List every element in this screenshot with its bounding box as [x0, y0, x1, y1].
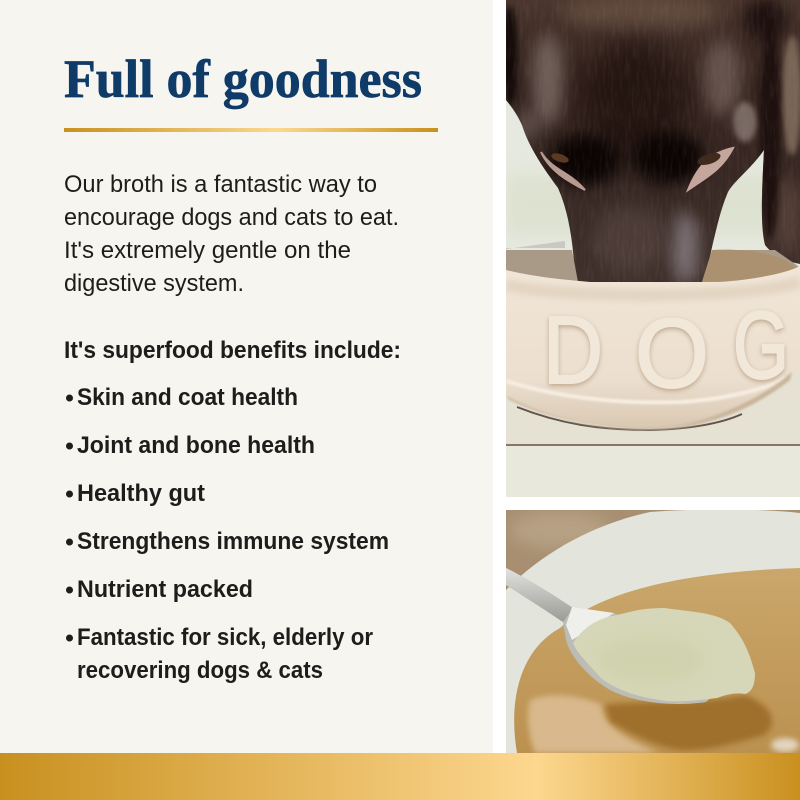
white soup bowl — [506, 509, 800, 753]
benefits heading: It's superfood benefits include: — [64, 337, 401, 364]
tiled floor — [506, 368, 800, 446]
gold divider — [64, 128, 438, 132]
title: Full of goodness — [64, 49, 422, 109]
photo: dog eating from bowl — [503, 0, 800, 497]
bowl highlight — [771, 738, 799, 752]
embossed lettering on bowl: D — [543, 297, 603, 404]
panel: text — [0, 0, 493, 753]
benefits list: recovering dogs & cats — [77, 657, 323, 684]
benefits list: Joint and bone health — [77, 432, 315, 459]
broth — [514, 568, 800, 753]
benefits list — [66, 384, 389, 684]
dog head — [503, 0, 800, 290]
benefits list: Skin and coat health — [77, 384, 298, 411]
benefits list: Fantastic for sick, elderly or — [77, 624, 373, 651]
gold footer band — [0, 753, 800, 800]
embossed lettering on bowl — [546, 310, 787, 394]
benefits list: Strengthens immune system — [77, 528, 389, 555]
intro paragraph: It's extremely gentle on the — [64, 237, 351, 264]
dog eyes — [541, 148, 733, 190]
intro paragraph: digestive system. — [64, 270, 244, 297]
ceramic bowl — [506, 241, 800, 446]
gelled broth on spoon — [573, 608, 755, 701]
benefits list: Nutrient packed — [77, 576, 253, 603]
photo: broth with spoon — [506, 509, 800, 753]
intro paragraph: Our broth is a fantastic way to — [64, 171, 377, 198]
embossed lettering on bowl: O — [635, 298, 709, 408]
intro paragraph: encourage dogs and cats to eat. — [64, 204, 399, 231]
benefits list: Healthy gut — [77, 480, 205, 507]
spoon — [506, 568, 720, 704]
intro paragraph — [64, 171, 399, 297]
